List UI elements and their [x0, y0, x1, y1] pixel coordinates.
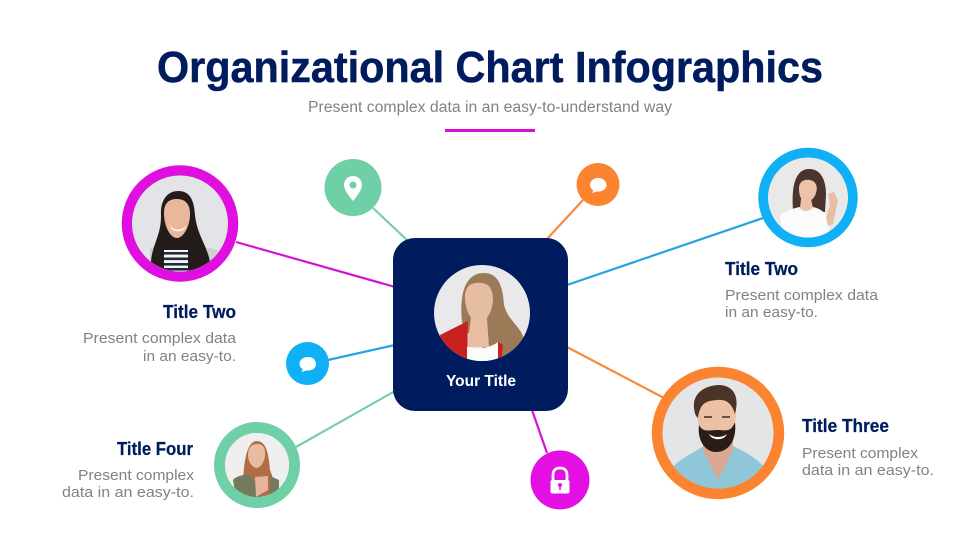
text block: title two right: Title Two — [725, 259, 798, 279]
subtitle: Present complex data in an easy-to-understand way — [308, 99, 672, 116]
title underline — [445, 129, 535, 132]
node: orange person — [657, 372, 779, 494]
text block: title two right: in an easy-to. — [725, 304, 818, 321]
text block: title four: data in an easy-to. — [62, 484, 194, 501]
connector lines — [236, 200, 766, 453]
icon: blue chat bubble — [286, 342, 329, 385]
text block: title two left: in an easy-to. — [143, 348, 236, 365]
text block: title two left: Title Two — [163, 302, 236, 322]
node: magenta person — [127, 170, 233, 276]
text block: title three: data in an easy-to. — [802, 462, 934, 479]
text block: title four — [62, 439, 195, 501]
text block: title three: Present complex — [802, 445, 919, 462]
title: Organizational Chart Infographics — [157, 43, 823, 92]
text block: title three — [802, 416, 934, 479]
node: green person — [220, 428, 294, 502]
text block: title four: Present complex — [78, 467, 195, 484]
text block: title four: Title Four — [117, 439, 193, 459]
label: your title: Your Title — [446, 373, 516, 390]
icon: orange chat bubble — [576, 163, 620, 206]
text block: title two left — [83, 302, 237, 365]
panel: central card — [393, 238, 568, 411]
icon: location pin — [324, 159, 382, 216]
icon: padlock — [530, 450, 590, 510]
text block: title two right: Present complex data — [725, 287, 879, 304]
node: blue person — [763, 153, 853, 242]
text block: title three: Title Three — [802, 416, 889, 436]
text block: title two right — [725, 259, 879, 321]
text block: title two left: Present complex data — [83, 330, 237, 347]
portrait: central woman — [434, 265, 530, 365]
